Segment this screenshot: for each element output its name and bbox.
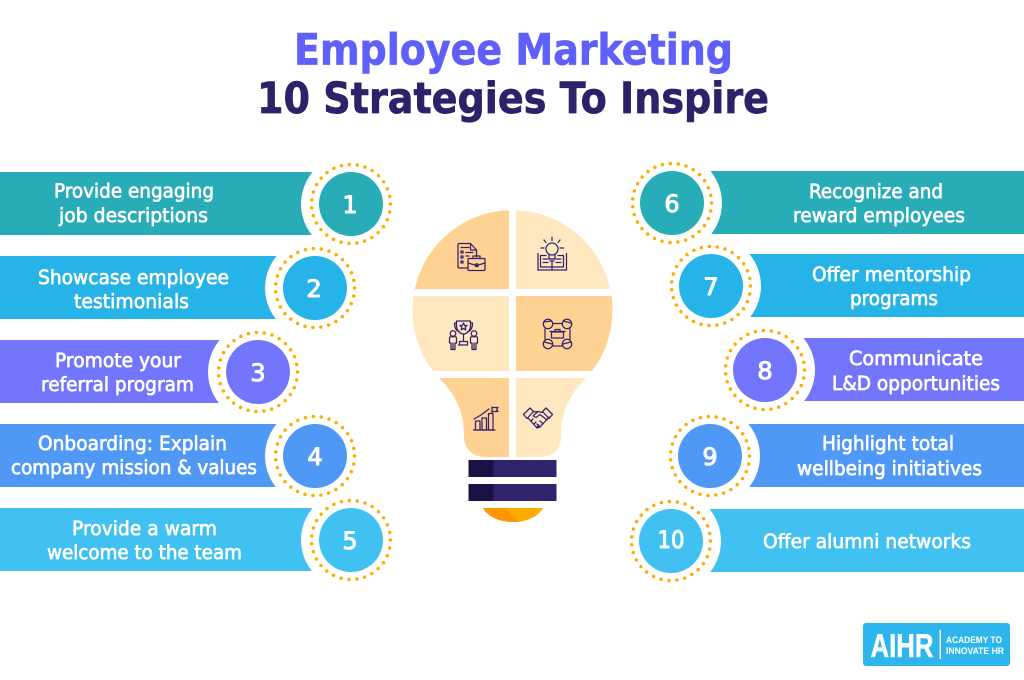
panel: strategy 8: Communicate: [849, 347, 983, 370]
logo: AIHR: [863, 623, 1010, 666]
panel: strategy 5: welcome to the team: [47, 541, 242, 564]
panel: strategy 2: Showcase employee: [38, 266, 229, 289]
title: 10 Strategies To Inspire: [257, 74, 769, 124]
panel: strategy 4: company mission & values: [11, 456, 257, 479]
panel: strategy 2: testimonials: [74, 290, 189, 313]
icon: trophy and two people: [450, 321, 478, 350]
light bulb: [412, 210, 612, 457]
icon: document and briefcase: [458, 244, 485, 270]
panel: strategy 7: programs: [850, 287, 938, 310]
icon: team around table: [543, 319, 572, 349]
title: [257, 26, 769, 124]
panel: strategy 3: 3: [250, 359, 266, 387]
icon: handshake: [524, 408, 552, 428]
panel: strategy 1: job descriptions: [58, 204, 208, 227]
panel: strategy 7: 7: [703, 273, 719, 301]
panel: strategy 3: Promote your: [55, 349, 182, 372]
panel: strategy 7: Offer mentorship: [812, 263, 971, 286]
panel: strategy 8: L&D opportunities: [832, 372, 1000, 395]
panel: strategy 8: 8: [757, 357, 773, 385]
panel: strategy 2: [0, 238, 365, 338]
panel: strategy 9: wellbeing initiatives: [797, 457, 982, 480]
panel: strategy 6: 6: [664, 190, 680, 218]
panel: strategy 1: Provide engaging: [54, 180, 214, 202]
title: Employee Marketing: [294, 26, 733, 76]
panel: strategy 6: [622, 153, 1024, 253]
panel: strategy 9: [660, 406, 1024, 506]
logo: AIHR: ACADEMY TO: [946, 635, 1002, 646]
panel: strategy 1: [0, 154, 401, 254]
panel: strategy 3: [0, 322, 308, 422]
panel: strategy 1: 1: [342, 191, 358, 219]
panel: strategy 5: Provide a warm: [72, 517, 217, 540]
panel: strategy 10: [621, 491, 1024, 591]
logo: AIHR: AIHR: [870, 627, 934, 664]
panel: strategy 6: reward employees: [793, 204, 965, 227]
panel: strategy 4: [0, 406, 365, 506]
panel: strategy 5: 5: [342, 527, 358, 555]
panel: strategy 6: Recognize and: [809, 180, 943, 203]
panel: strategy 4: Onboarding: Explain: [38, 432, 227, 455]
panel: strategy 5: [0, 490, 401, 590]
panel: strategy 9: 9: [702, 443, 718, 471]
panel: strategy 8: [715, 320, 1024, 420]
panel: strategy 3: referral program: [41, 373, 194, 396]
icon: growth chart with flag: [474, 407, 498, 430]
panel: strategy 10: 10: [658, 526, 684, 554]
panel: strategy 9: Highlight total: [822, 432, 954, 455]
panel: strategy 7: [661, 236, 1024, 336]
panel: strategy 10: Offer alumni networks: [763, 530, 971, 553]
icon: lightbulb over book: [538, 238, 566, 270]
panel: strategy 2: 2: [306, 275, 322, 303]
logo: AIHR: INNOVATE HR: [946, 646, 1004, 657]
bulb base: [468, 460, 556, 522]
panel: strategy 4: 4: [307, 443, 323, 471]
